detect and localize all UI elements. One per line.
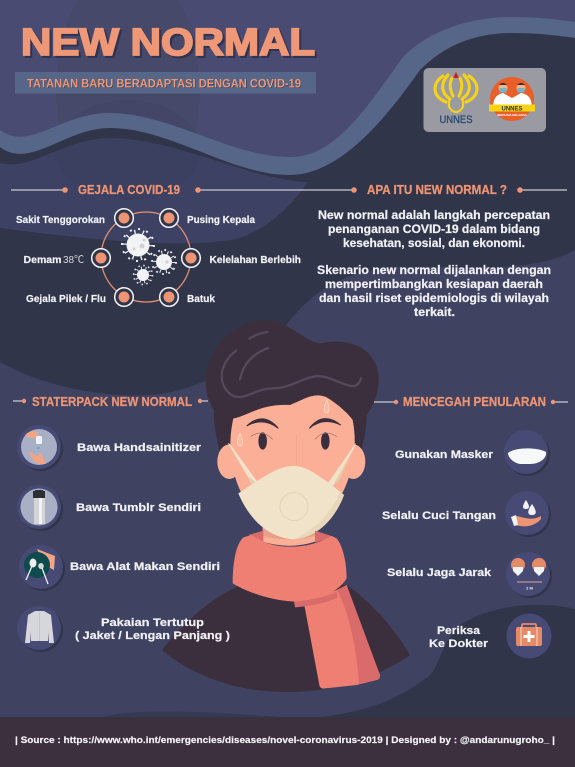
footer bar — [0, 717, 575, 767]
person illustration — [162, 320, 410, 692]
face mask — [238, 466, 344, 539]
logos panel — [424, 68, 546, 132]
label: jacket — [75, 617, 230, 642]
ears — [217, 444, 365, 479]
icon: large virus — [122, 229, 154, 261]
symptom labels: Demam — [24, 255, 62, 266]
neck — [263, 520, 315, 546]
scarf tail — [304, 585, 380, 689]
icon: small virus — [134, 266, 152, 284]
label: face mask: Gunakan Masker — [395, 449, 494, 461]
icon: keep distance — [506, 552, 552, 598]
symptom labels — [16, 215, 301, 305]
icon: jacket — [17, 606, 63, 652]
symptom labels: Kelelahan Berlebih — [210, 255, 301, 266]
paragraph: what is new normal: terkait. — [414, 307, 455, 319]
icon: cutlery — [19, 545, 65, 591]
subtitle banner — [15, 72, 316, 94]
label: keep distance: Selalu Jaga Jarak — [387, 567, 492, 579]
icon: tumbler — [17, 485, 63, 531]
label: see a doctor: Ke Dokter — [429, 638, 489, 650]
icon: UNNES emblem — [435, 72, 477, 112]
logos panel: UNNES — [440, 114, 472, 126]
heading: mencegah penularan: MENCEGAH PENULARAN — [403, 395, 546, 409]
sweat drops — [237, 400, 329, 446]
icon: volunteers badge: BERSAMA MELAWAN — [497, 113, 527, 117]
footer bar: | Source : https://www.who.int/emergencies/diseases/novel-coronavirus-2019 | Designed by : @andarunugroho_ | — [15, 735, 555, 746]
heading: apa itu new normal: APA ITU NEW NORMAL ? — [367, 183, 507, 197]
hair highlights — [222, 332, 361, 397]
eyes and brows — [247, 419, 341, 450]
icon: face mask — [504, 430, 550, 476]
paragraph: what is new normal: mempertimbangkan kesiapan daerah — [325, 279, 543, 291]
subtitle banner: TATANAN BARU BERADAPTASI DENGAN COVID-19 — [28, 79, 302, 91]
icon: hand sanitizer — [17, 425, 63, 471]
heading: starterpack: STATERPACK NEW NORMAL — [32, 395, 192, 409]
wave band — [0, 17, 575, 175]
label: see a doctor — [429, 625, 489, 650]
icon: keep distance: 2 M — [526, 586, 534, 590]
label: jacket: Pakaian Tertutup — [101, 617, 204, 629]
symptom labels: Gejala Pilek / Flu — [26, 294, 106, 305]
title: NEW NORMAL — [21, 22, 315, 64]
label: cutlery: Bawa Alat Makan Sendiri — [70, 561, 220, 573]
scarf wrap — [248, 531, 333, 543]
symptom labels: Sakit Tenggorokan — [16, 215, 105, 226]
symptom labels: Batuk — [187, 294, 215, 305]
hair — [206, 320, 379, 487]
icon: volunteers badge — [489, 77, 535, 121]
icon: volunteers badge: UNNES — [501, 106, 523, 112]
mask straps — [228, 443, 356, 486]
label: jacket: ( Jaket / Lengan Panjang ) — [75, 630, 230, 642]
title: NEW NORMAL — [23, 24, 317, 66]
paragraph: what is new normal: kesehatan, sosial, dan ekonomi. — [343, 238, 525, 250]
symptom ring diagram — [92, 209, 200, 306]
label: tumbler: Bawa Tumblr Sendiri — [76, 502, 201, 514]
paragraph: what is new normal: New normal adalah langkah percepatan — [318, 210, 550, 222]
heading: apa itu new normal — [351, 183, 567, 197]
face — [230, 395, 355, 533]
icon: first aid kit — [506, 614, 552, 658]
label: see a doctor: Periksa — [437, 625, 481, 637]
heading: gejala covid-19 — [11, 183, 354, 197]
body — [162, 585, 410, 692]
label: hand sanitizer: Bawa Handsainitizer — [77, 442, 202, 454]
icon: hand washing — [505, 491, 551, 537]
symptom labels: 38℃ — [63, 255, 84, 266]
label: hand washing: Selalu Cuci Tangan — [382, 510, 496, 522]
paragraph: what is new normal — [317, 210, 551, 319]
symptom labels: Pusing Kepala — [187, 215, 255, 226]
paragraph: what is new normal: Skenario new normal dijalankan dengan — [317, 265, 551, 277]
subtitle banner: TATANAN BARU BERADAPTASI DENGAN COVID-19 — [27, 78, 301, 90]
paragraph: what is new normal: penanganan COVID-19 dalam bidang — [328, 224, 540, 236]
heading: gejala covid-19: GEJALA COVID-19 — [78, 183, 180, 197]
icon: medium virus — [152, 250, 176, 274]
paragraph: what is new normal: dan hasil riset epidemiologis di wilayah — [319, 293, 549, 305]
